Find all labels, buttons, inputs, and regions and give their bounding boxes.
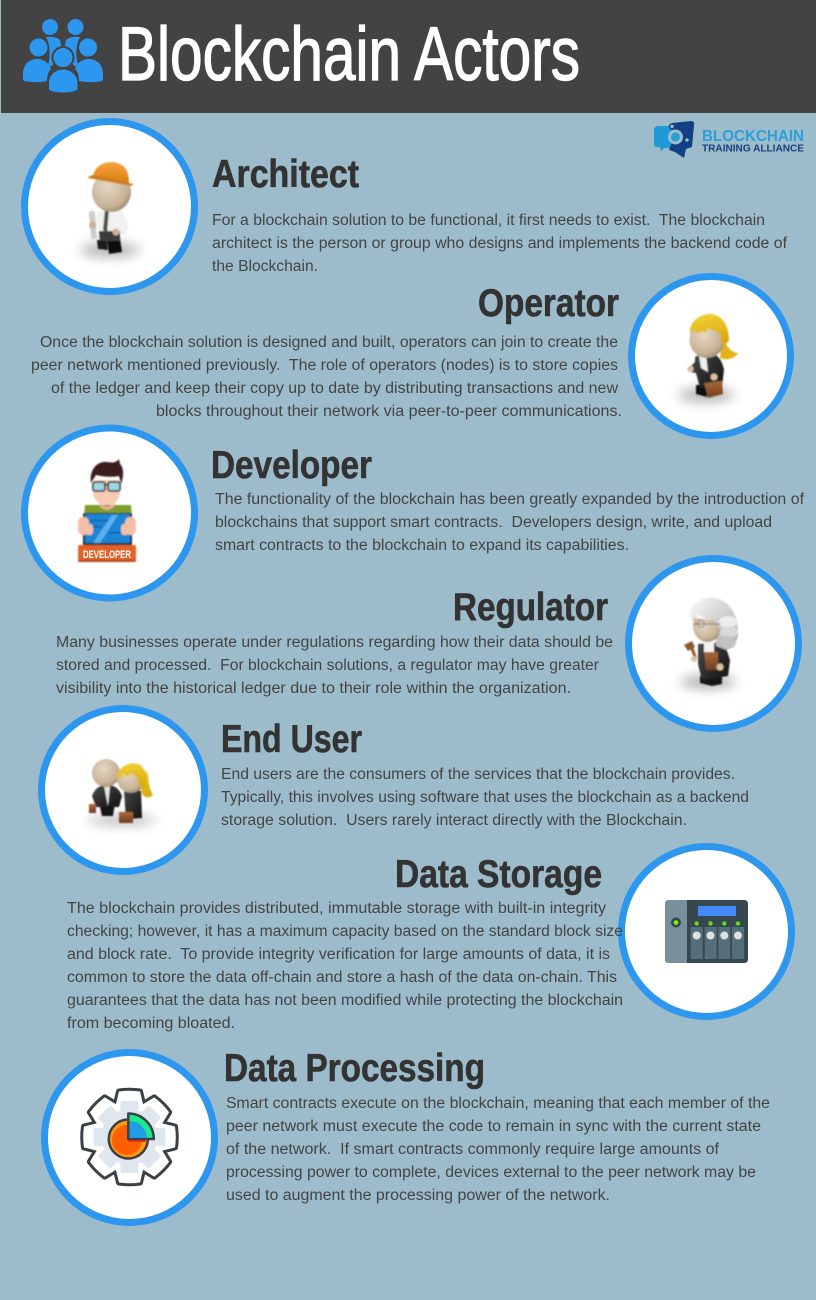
- text: developer description: smart contracts to the blockchain to expand its capabilities.: [215, 537, 629, 554]
- text: operator description: [31, 334, 622, 420]
- text: data processing description: peer network must execute the code to remain in sync with the current state: [226, 1118, 761, 1135]
- heading: Regulator: Regulator: [453, 586, 608, 629]
- text: data processing description: processing power to complete, devices external to the peer network may be: [226, 1164, 756, 1181]
- text: regulator description: [56, 634, 613, 697]
- icon: gear with pie chart in circle: [44, 1052, 214, 1222]
- panel: developer: [24, 428, 805, 598]
- badge label: DEVELOPER: [83, 549, 131, 561]
- text: architect description: the Blockchain.: [212, 258, 318, 275]
- icon: regulator in circle: [628, 558, 798, 728]
- icon: developer in circle: [24, 428, 194, 598]
- text: data storage description: guarantees that the data has not been modified while protecting the blockchain: [67, 992, 623, 1009]
- heading: Developer: Developer: [211, 444, 372, 487]
- text: regulator description: visibility into the historical ledger due to their role within the organization.: [56, 680, 571, 697]
- text: regulator description: stored and processed. For blockchain solutions, a regulator may have greater: [56, 657, 599, 674]
- heading: Data Storage: Data Storage: [395, 853, 602, 896]
- panel: end user: [42, 708, 749, 872]
- text: data processing description: Smart contracts execute on the blockchain, meaning that each member of the: [226, 1095, 770, 1112]
- text: end user description: storage solution. Users rarely interact directly with the Blockchain.: [221, 812, 687, 829]
- text: data storage description: checking; however, it has a maximum capacity based on the standard block size: [67, 923, 623, 940]
- title: Blockchain Actors: [118, 12, 580, 97]
- icon: architect in circle: [24, 122, 194, 292]
- text: operator description: Once the blockchain solution is designed and built, operators can join to create the: [40, 334, 618, 351]
- text: developer description: [215, 491, 805, 554]
- logo wordmark: TRAINING ALLIANCE: [702, 144, 804, 154]
- logo wordmark: BLOCKCHAIN: [702, 128, 804, 145]
- text: architect description: architect is the person or group who designs and implements the backend code of: [212, 235, 788, 252]
- text: operator description: of the ledger and keep their copy up to date by distributing transactions and new: [51, 380, 619, 397]
- text: data storage description: The blockchain provides distributed, immutable storage with built-in integrity: [67, 900, 606, 917]
- text: operator description: peer network mentioned previously. The role of operators (nodes) is to store copies: [31, 357, 618, 374]
- panel: data processing: [44, 1047, 770, 1222]
- text: end user description: Typically, this involves using software that uses the blockchain as a backend: [221, 789, 749, 806]
- text: regulator description: Many businesses operate under regulations regarding how their data should be: [56, 634, 613, 651]
- header band: [1, 0, 816, 113]
- panel: operator: [31, 276, 790, 436]
- icon: storage server in circle: [622, 846, 792, 1016]
- text: data processing description: used to augment the processing power of the network.: [226, 1187, 610, 1204]
- panel: data storage: [67, 846, 792, 1032]
- icon: end users in circle: [42, 708, 204, 872]
- text: data storage description: [67, 900, 623, 1032]
- text: data processing description: [226, 1095, 770, 1204]
- logo wordmark: [702, 128, 804, 154]
- text: data processing description: of the network. If smart contracts commonly require large amounts of: [226, 1141, 720, 1158]
- text: end user description: End users are the consumers of the services that the blockchain provides.: [221, 766, 735, 783]
- heading: Data Processing: Data Processing: [224, 1047, 485, 1090]
- heading: Operator: Operator: [478, 282, 619, 325]
- heading: End User: End User: [221, 718, 362, 761]
- text: data storage description: and block rate. To provide integrity verification for large amounts of data, it is: [67, 946, 610, 963]
- panel: regulator: [56, 558, 798, 728]
- text: architect description: [212, 212, 788, 275]
- text: end user description: [221, 766, 749, 829]
- panel: architect: [24, 122, 788, 292]
- heading: Architect: Architect: [212, 153, 359, 196]
- text: data storage description: from becoming bloated.: [67, 1015, 235, 1032]
- icon: operator in circle: [632, 276, 790, 436]
- logo: Blockchain Training Alliance: [654, 121, 804, 158]
- text: operator description: blocks throughout their network via peer-to-peer communications.: [156, 403, 622, 420]
- text: data storage description: common to store the data off-chain and store a hash of the data on-chain. This: [67, 969, 617, 986]
- text: developer description: The functionality of the blockchain has been greatly expanded by the introduction of: [215, 491, 805, 508]
- text: developer description: blockchains that support smart contracts. Developers design, write, and upload: [215, 514, 772, 531]
- icon: group of people: [23, 19, 103, 93]
- text: architect description: For a blockchain solution to be functional, it first needs to exist. The blockchain: [212, 212, 765, 229]
